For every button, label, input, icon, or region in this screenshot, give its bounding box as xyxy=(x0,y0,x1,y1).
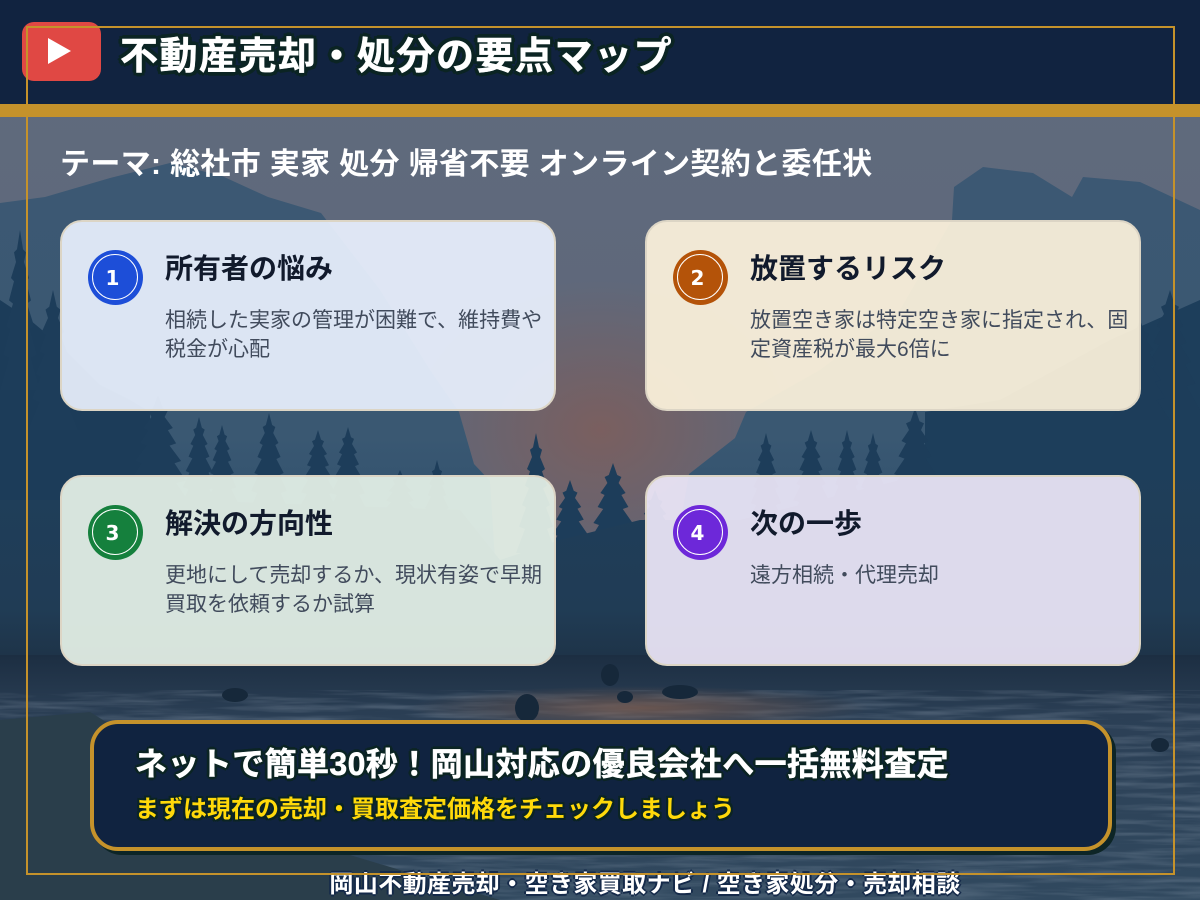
theme heading: テーマ: 総社市 実家 処分 帰省不要 オンライン契約と委任状 xyxy=(60,148,873,181)
icon: play triangle xyxy=(48,38,71,64)
panel: 所有者の悩み xyxy=(60,220,556,411)
number badge 2 xyxy=(673,250,728,305)
card text 2: 放置空き家は特定空き家に指定され、固定資産税が最大6倍に xyxy=(750,309,1128,361)
number badge 1 xyxy=(88,250,143,305)
card heading 2: 放置するリスク xyxy=(750,253,946,284)
callout subline: まずは現在の売却・買取査定価格をチェックしましょう xyxy=(135,796,735,823)
number badge 2: 2 xyxy=(691,266,704,290)
card text 4: 遠方相続・代理売却 xyxy=(750,564,939,587)
panel: 放置するリスク xyxy=(645,220,1141,411)
card text 1: 相続した実家の管理が困難で、維持費や税金が心配 xyxy=(165,309,542,361)
gold header rule xyxy=(0,104,1200,117)
number badge 4: 4 xyxy=(691,521,704,545)
card heading 4: 次の一歩 xyxy=(750,508,862,539)
callout: call to action xyxy=(90,720,1112,851)
title: 不動産売却・処分の要点マップ xyxy=(120,36,673,78)
number badge 3 xyxy=(88,505,143,560)
card heading 3: 解決の方向性 xyxy=(165,508,333,539)
number badge 4 xyxy=(673,505,728,560)
icon: play button xyxy=(22,22,101,81)
panel: 次の一歩 xyxy=(645,475,1141,666)
card text 3: 更地にして売却するか、現状有姿で早期買取を依頼するか試算 xyxy=(165,564,542,616)
footer credit: 岡山不動産売却・空き家買取ナビ / 空き家処分・売却相談 xyxy=(329,871,961,898)
card heading 1: 所有者の悩み xyxy=(165,253,333,284)
number badge 3: 3 xyxy=(106,521,119,545)
panel: 解決の方向性 xyxy=(60,475,556,666)
number badge 1: 1 xyxy=(106,266,119,290)
header bar xyxy=(0,0,1200,104)
callout headline: ネットで簡単30秒！岡山対応の優良会社へ一括無料査定 xyxy=(135,746,949,782)
